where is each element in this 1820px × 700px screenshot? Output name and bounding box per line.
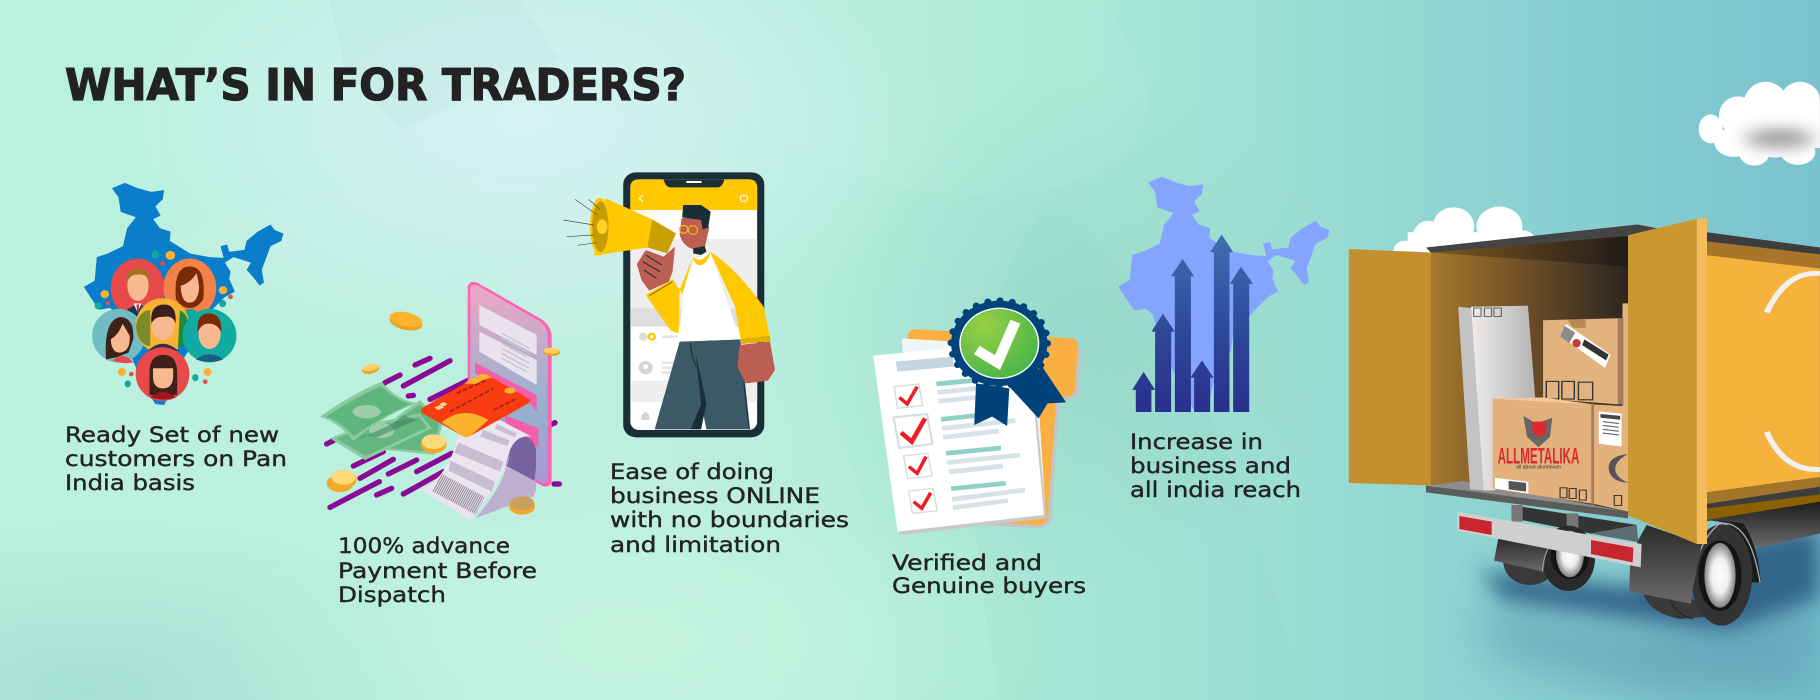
icon: India map blue <box>84 183 284 405</box>
icon: cloud top right <box>1699 82 1820 166</box>
icon: man head <box>679 205 711 255</box>
text: advance payment: 100% advance <box>338 534 510 558</box>
panel: delivery truck upper <box>1393 82 1820 521</box>
icon: credit card <box>421 374 530 437</box>
panel: advance payment <box>320 282 560 520</box>
avatar: man centre <box>136 298 189 354</box>
avatar: man teal <box>183 309 236 362</box>
icon: coins <box>327 309 560 515</box>
truck doors <box>1349 218 1707 544</box>
icon: checklist sheet <box>873 338 1046 535</box>
text: advance payment: Payment Before <box>338 559 537 583</box>
icon: folder <box>908 329 1081 528</box>
text: online business: Ease of doing <box>610 460 774 484</box>
cargo: front carton with logo: ALLMETALIKA <box>1498 444 1579 469</box>
icon: receipt <box>422 420 536 520</box>
text: new customers: Ready Set of new <box>65 423 279 447</box>
truck side body <box>1707 232 1820 521</box>
logo emblem <box>1523 416 1552 447</box>
rear bumper <box>1457 512 1642 567</box>
text: business growth: business and <box>1130 454 1291 478</box>
carton label <box>1495 478 1528 494</box>
panel: truck cargo bay <box>1349 218 1707 544</box>
panel: new customers across India <box>84 183 284 405</box>
avatar: woman grey teal <box>92 309 145 363</box>
logo tagline: all about aluminium <box>1516 464 1561 470</box>
icon: banknotes <box>320 382 443 460</box>
text: new customers: India basis <box>65 471 195 495</box>
panel: online business <box>564 172 775 437</box>
text: new customers: customers on Pan <box>65 447 287 471</box>
icon: India map periwinkle <box>1118 177 1330 411</box>
panel: business growth <box>1118 177 1330 412</box>
text: online business: with no boundaries <box>610 508 849 532</box>
cargo: side carton <box>1591 404 1628 512</box>
panel: verified buyers <box>873 301 1081 535</box>
text: verified buyers: Genuine buyers <box>892 574 1086 598</box>
front wheel <box>1629 520 1761 626</box>
icon: phone <box>468 282 552 487</box>
avatar: man in suit <box>111 258 164 318</box>
text: verified buyers: Verified and <box>892 551 1042 575</box>
text: advance payment: Dispatch <box>338 583 446 607</box>
cargo: grey sheet <box>1458 306 1535 490</box>
chassis tube <box>1707 502 1820 548</box>
text: business growth: Increase in <box>1130 430 1263 454</box>
rear wheels <box>1494 526 1595 591</box>
text: online business: business ONLINE <box>610 484 820 508</box>
axle frame <box>1512 505 1637 542</box>
icon: cloud behind truck <box>1393 207 1534 262</box>
icon: man hands <box>637 247 775 383</box>
chart: rising arrows <box>1132 234 1253 412</box>
truck undercarriage, wheels and bumper <box>1457 502 1820 626</box>
ground shadow under truck <box>1473 527 1820 697</box>
avatar: woman red <box>136 347 189 401</box>
icon: megaphone <box>564 198 676 256</box>
cargo: front carton with logo <box>1493 397 1594 504</box>
icon: purple speed stripes <box>327 358 559 507</box>
icon: ribbon rosette <box>951 301 1066 426</box>
text: business growth: all india reach <box>1130 478 1301 502</box>
cargo: back carton <box>1543 318 1623 404</box>
cargo interior <box>1426 225 1658 518</box>
icon: man torso and legs <box>646 252 771 429</box>
avatar: woman orange <box>163 258 216 318</box>
title: WHAT’S IN FOR TRADERS? <box>65 60 686 111</box>
text: online business: and limitation <box>610 533 781 557</box>
icon: confetti dots <box>95 250 233 387</box>
icon: smartphone <box>623 172 764 437</box>
